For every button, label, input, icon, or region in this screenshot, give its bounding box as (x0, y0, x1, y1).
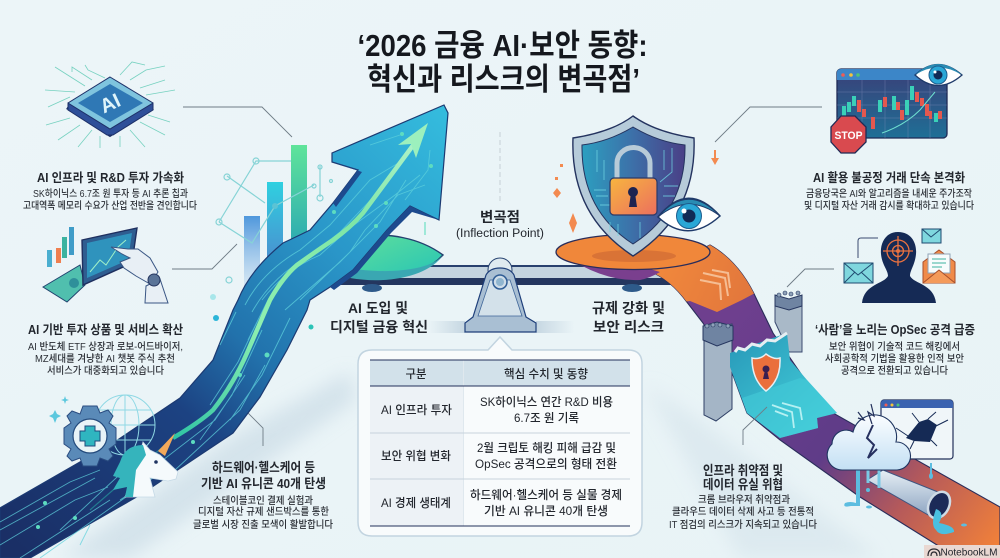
text: unicorn (193, 460, 333, 531)
bar chart with network lines (210, 145, 332, 330)
text: AI investment products: 서비스가 대중화되고 있습니다 (47, 365, 164, 377)
text: infrastructure: 인프라 취약점 및 (703, 463, 783, 478)
title: 혁신과 리스크의 변곡점’ (367, 62, 640, 97)
callout lines right (715, 107, 834, 445)
right ribbon (652, 244, 1000, 545)
fulcrum (428, 268, 574, 333)
icon: unicorn (113, 433, 178, 497)
title: ‘2026 금융 AI·보안 동향: (358, 28, 648, 63)
text: unicorn: 디지털 자산 규제 샌드박스를 통한 (198, 505, 329, 518)
comparison table card: 구분 (406, 367, 426, 381)
text: OpSec (815, 323, 975, 377)
text: AI infrastructure: 고대역폭 메모리 수요가 산업 전반을 견인합니다 (23, 199, 197, 212)
left scale label: 디지털 금융 혁신 (330, 319, 428, 335)
text: unicorn: 기반 AI 유니콘 40개 탄생 (201, 476, 326, 491)
text: AI investment products: AI 기반 투자 상품 및 서비스 확산 (28, 322, 183, 337)
rising blue arrow ribbon (0, 105, 448, 558)
text: AI investment products: AI 반도체 ETF 상장과 로보-어드바이저, (28, 340, 183, 353)
comparison table card: 하드웨어·헬스케어 등 실물 경제 (470, 488, 622, 502)
icon: stock chart with stop sign and eye: STOP (834, 130, 862, 142)
callout lines left (172, 107, 292, 446)
icon: targeted person and envelopes (844, 229, 955, 303)
left green pan (340, 222, 443, 280)
text: infrastructure: 데이터 유실 위협 (703, 477, 783, 492)
icon: AI chip: AI (97, 90, 124, 118)
text: unicorn: 스테이블코인 결제 실험과 (213, 494, 313, 507)
comparison table card: 6.7조 원 기록 (514, 411, 579, 425)
icon: broken window (881, 400, 953, 459)
icon: shield eye (658, 198, 720, 231)
text: infrastructure: IT 점검의 리스크가 지속되고 있습니다 (669, 518, 817, 531)
text: unfair trading (804, 170, 974, 212)
text: AI infrastructure (23, 170, 197, 212)
comparison table card: 2월 크립토 해킹 피해 급감 및 (477, 441, 616, 455)
comparison table card: SK하이닉스 연간 R&D 비용 (480, 395, 613, 409)
icon: leaking pipe (844, 463, 967, 534)
icon: stock chart with stop sign and eye (831, 64, 962, 153)
icon: robot hand tablet (43, 227, 168, 303)
text: AI investment products: MZ세대를 겨냥한 AI 챗봇 주식 추천 (35, 352, 175, 365)
inflection point label (456, 132, 544, 240)
icon: cracked cloud (827, 404, 911, 470)
comparison table card: 보안 위협 변화 (381, 448, 451, 463)
comparison table card: 핵심 수치 및 동향 (504, 366, 588, 381)
text: unicorn: 하드웨어·헬스케어 등 (212, 460, 315, 475)
text: infrastructure: 크롬 브라우저 취약점과 (698, 493, 790, 506)
right scale label: 규제 강화 및 (592, 300, 665, 316)
icon: shield with padlock (553, 116, 719, 256)
comparison table card: 기반 AI 유니콘 40개 탄생 (484, 504, 608, 518)
icon: AI chip (45, 62, 175, 148)
inflection point label: (Inflection Point) (456, 228, 544, 240)
comparison table card (358, 337, 642, 536)
text: AI investment products (28, 322, 183, 377)
right scale label (592, 300, 665, 335)
left scale label (330, 300, 428, 335)
ribbon shadows (60, 372, 880, 558)
sparkles (553, 150, 719, 233)
right scale label: 보안 리스크 (593, 319, 664, 335)
right orange pan (556, 234, 710, 280)
icon: castle wall with shield (703, 291, 837, 438)
text: infrastructure: 클라우드 데이터 삭제 사고 등 전통적 (672, 506, 814, 518)
text: unfair trading: 금융당국은 AI와 알고리즘을 내세운 주가조작 (806, 187, 972, 200)
icon: gear and globe (49, 395, 155, 466)
scale beam (300, 258, 730, 292)
comparison table card: OpSec 공격으로의 형태 전환 (475, 456, 617, 471)
text: OpSec: 보안 위협이 기술적 코드 해킹에서 (829, 340, 960, 353)
text: unicorn: 글로벌 시장 진출 모색이 활발합니다 (193, 518, 333, 531)
text: unfair trading: 및 디지털 자산 거래 감시를 확대하고 있습니다 (804, 199, 974, 212)
text: unfair trading: AI 활용 불공정 거래 단속 본격화 (813, 170, 965, 185)
inflection point label: 변곡점 (480, 209, 520, 225)
title (358, 28, 648, 97)
text: OpSec: 공격으로 전환되고 있습니다 (841, 365, 948, 377)
left scale label: AI 도입 및 (348, 300, 408, 316)
text: infrastructure (669, 463, 817, 531)
comparison table card: AI 인프라 투자 (381, 403, 452, 417)
comparison table card: AI 경제 생태계 (381, 495, 451, 510)
text: OpSec: 사회공학적 기법을 활용한 인적 보안 (825, 352, 964, 365)
text: OpSec: ‘사람’을 노리는 OpSec 공격 급증 (815, 323, 975, 337)
NotebookLM badge (924, 545, 1000, 558)
text: AI infrastructure: AI 인프라 및 R&D 투자 가속화 (37, 170, 184, 185)
text: AI infrastructure: SK하이닉스 6.7조 원 투자 등 AI 추론 칩과 (33, 187, 188, 200)
